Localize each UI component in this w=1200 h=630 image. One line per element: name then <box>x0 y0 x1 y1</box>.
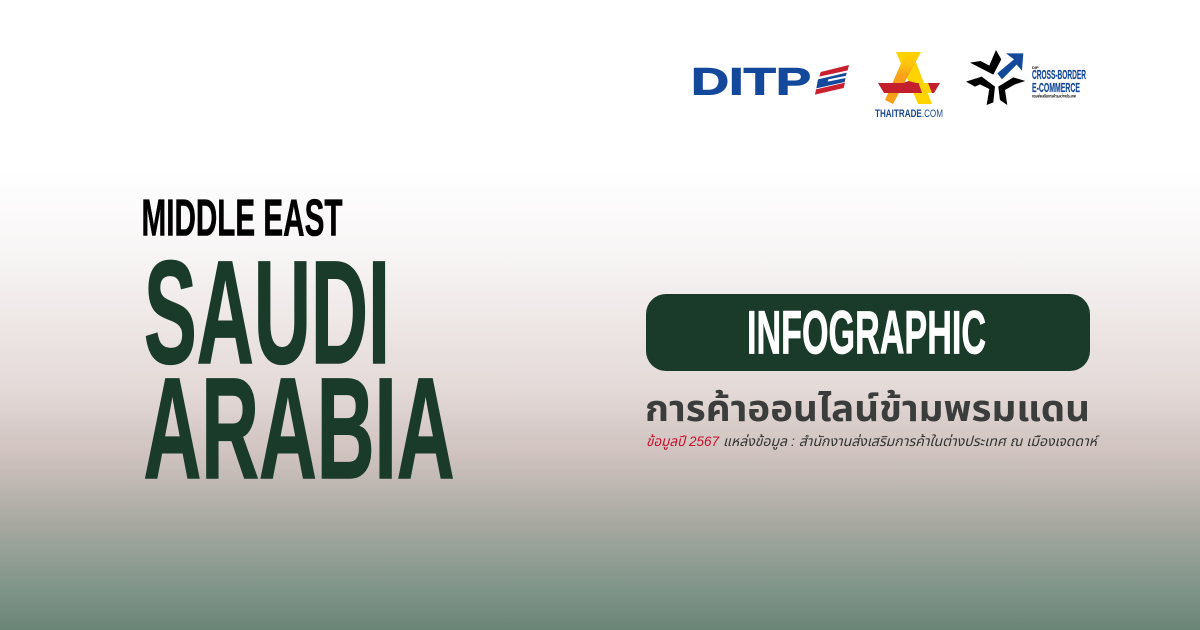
heading: region: MIDDLE EAST <box>142 190 343 248</box>
logo: DITP: DITP <box>691 62 811 104</box>
icon: star with arrow <box>966 50 1025 105</box>
banner: infographic: INFOGRAPHIC <box>747 298 986 366</box>
logo: Cross-Border E-Commerce <box>966 50 1086 105</box>
source note: แหล่งข้อมูล : สำนักงานส่งเสริมการค้าในต่างประเทศ ณ เมืองเจดดาห์ <box>723 433 1100 450</box>
text: logo wordmark: กรมส่งเสริมการค้าระหว่างประเทศ <box>1032 94 1076 98</box>
logo: ThaiTrade <box>875 52 943 120</box>
logo: ThaiTrade: THAITRADE.COM <box>875 108 943 120</box>
subtitle: Thai heading: การค้าออนไลน์ข้ามพรมแดน <box>645 388 1090 429</box>
text: logo wordmark <box>1032 65 1086 98</box>
logo: DITP <box>691 62 849 104</box>
title: country <box>144 231 454 509</box>
text: logo wordmark: CROSS-BORDER <box>1032 67 1086 82</box>
banner: infographic <box>646 294 1090 371</box>
title: country: SAUDI <box>144 231 390 395</box>
text: logo wordmark: DIP <box>1032 65 1039 70</box>
text: logo wordmark: E-COMMERCE <box>1032 80 1080 95</box>
title: country: ARABIA <box>144 348 454 509</box>
source note: ข้อมูลปี 2567 <box>646 433 720 450</box>
